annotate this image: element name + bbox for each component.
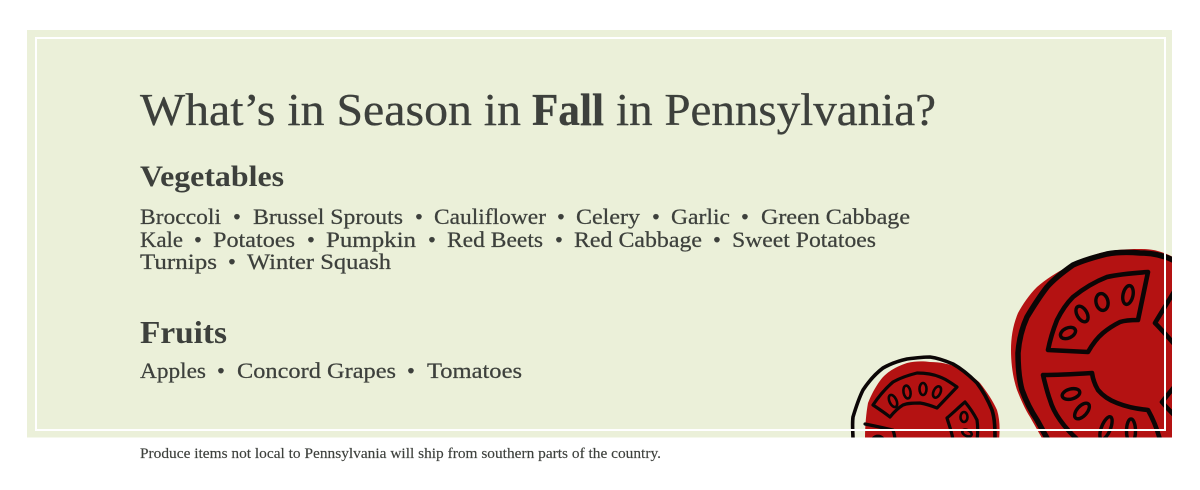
heading: vegetables: Vegetables — [140, 160, 284, 193]
tomato illustrations — [853, 249, 1175, 443]
list: vegetables: Red Beets — [447, 227, 543, 252]
list: vegetables — [140, 204, 910, 274]
list: vegetables: Broccoli — [140, 204, 221, 229]
list: vegetables: Potatoes — [213, 227, 295, 252]
list: vegetables: • — [555, 227, 563, 252]
list: fruits: Tomatoes — [427, 358, 522, 383]
icon: large tomato slice — [1011, 249, 1175, 443]
white inner border — [36, 38, 1165, 430]
icon: small tomato slice — [853, 357, 1000, 440]
list: vegetables: • — [194, 227, 202, 252]
list: vegetables: • — [307, 227, 315, 252]
list: vegetables: Green Cabbage — [761, 204, 910, 229]
title — [140, 84, 936, 135]
list: vegetables: • — [652, 204, 660, 229]
list: fruits — [140, 358, 522, 383]
list: vegetables: Garlic — [671, 204, 730, 229]
list: vegetables: Red Cabbage — [574, 227, 702, 252]
list: vegetables: Turnips — [140, 249, 217, 274]
title: in Pennsylvania? — [616, 84, 936, 135]
list: vegetables: Celery — [576, 204, 641, 229]
list: vegetables: • — [741, 204, 749, 229]
footnote: Produce items not local to Pennsylvania will ship from southern parts of the country. — [140, 446, 661, 462]
list: fruits: Concord Grapes — [237, 358, 396, 383]
list: fruits: • — [407, 358, 415, 383]
list: vegetables: • — [557, 204, 565, 229]
list: vegetables: Kale — [140, 227, 183, 252]
list: fruits: • — [217, 358, 225, 383]
list: vegetables: • — [428, 227, 436, 252]
list: fruits: Apples — [140, 358, 206, 383]
list: vegetables: • — [415, 204, 423, 229]
list: vegetables: Winter Squash — [247, 249, 391, 274]
heading: fruits: Fruits — [140, 314, 227, 350]
list: vegetables: • — [713, 227, 721, 252]
title: Fall — [532, 84, 604, 135]
title: What’s in Season in — [140, 84, 521, 135]
list: vegetables: • — [233, 204, 241, 229]
list: vegetables: Sweet Potatoes — [732, 227, 876, 252]
panel: background — [27, 30, 1172, 438]
list: vegetables: Cauliflower — [434, 204, 547, 229]
list: vegetables: • — [228, 249, 236, 274]
list: vegetables: Brussel Sprouts — [253, 204, 403, 229]
list: vegetables: Pumpkin — [326, 227, 416, 252]
